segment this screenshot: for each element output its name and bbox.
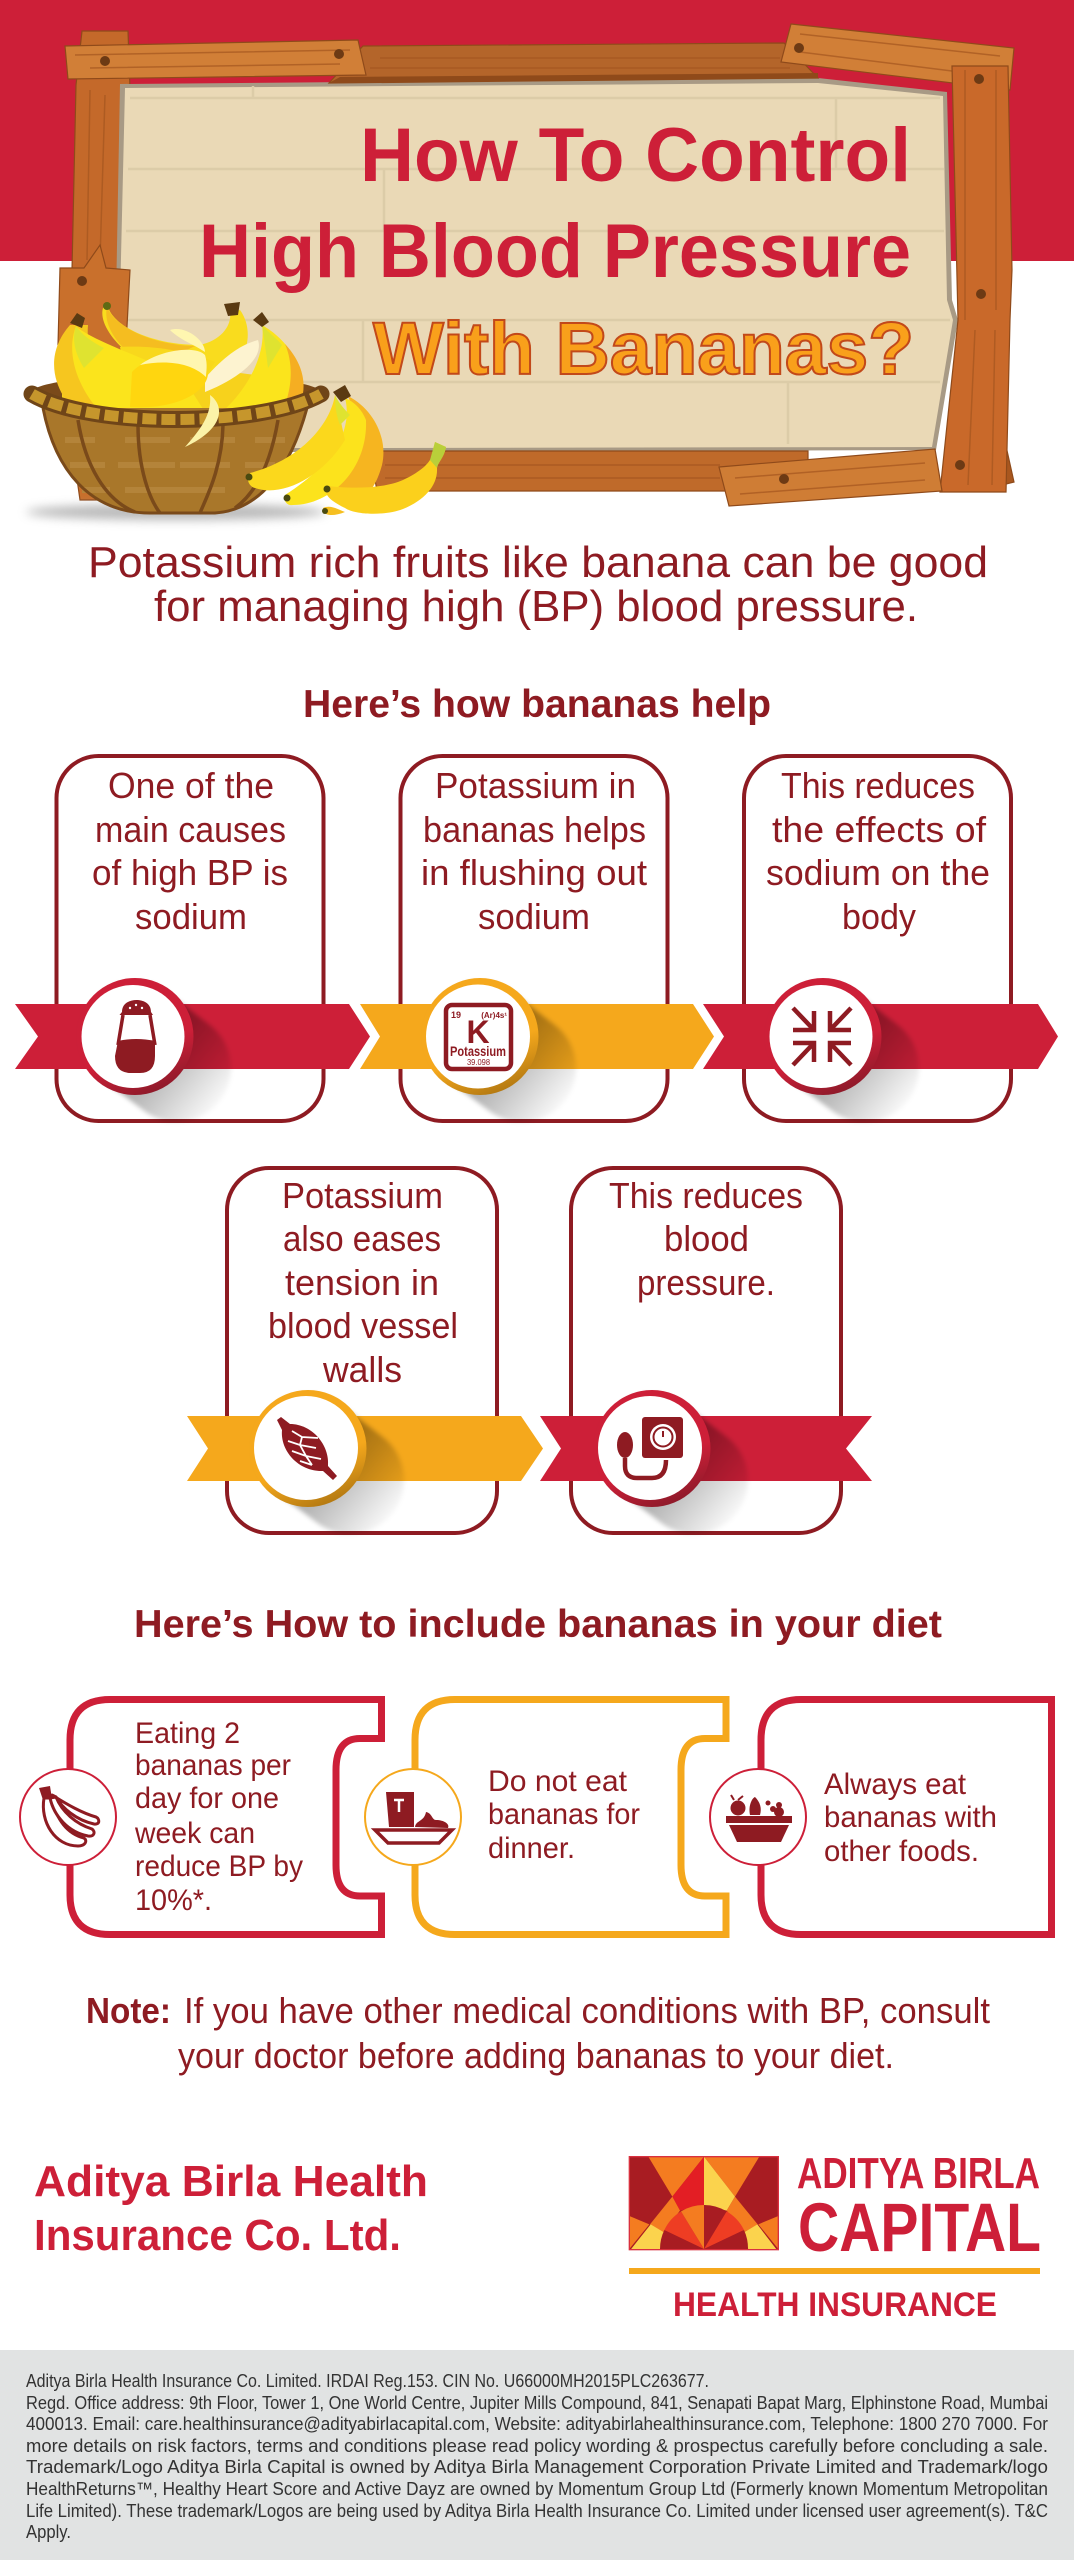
tip card 2 text: Do not eat	[488, 1765, 628, 1798]
disclaimer footer: Trademark/Logo Aditya Birla Capital is owned by Aditya Birla Management Corporation Private Limited and Trademark/logo	[26, 2457, 1048, 2477]
basket back rim	[29, 374, 323, 414]
icon: potassium element tile	[422, 978, 538, 1095]
step card 5 text: pressure.	[637, 1262, 775, 1303]
tip card 2 text: dinner.	[488, 1832, 575, 1865]
tip card 1 text: day for one	[135, 1782, 279, 1815]
intro text: for managing high (BP) blood pressure.	[154, 582, 918, 631]
tip card 2 text: bananas for	[488, 1798, 640, 1831]
Aditya Birla Capital logo: HEALTH INSURANCE	[673, 2286, 997, 2324]
ribbon arrow 2	[360, 1004, 714, 1069]
step card 1 text: sodium	[135, 896, 247, 937]
step card 1 text: main causes	[95, 809, 286, 850]
icon: potassium element tile: 39.098	[467, 1057, 490, 1067]
step card 1 text	[92, 765, 288, 937]
wooden right post	[940, 66, 1012, 492]
icon: banana bunch	[20, 1769, 116, 1865]
title: High Blood Pressure	[199, 209, 911, 294]
company name: Insurance Co. Ltd.	[34, 2211, 401, 2260]
step card 1 text: of high BP is	[92, 852, 288, 893]
disclaimer footer: 400013. Email: care.healthinsurance@adityabirlacapital.com, Website: adityabirlahealthinsurance.com, Telephone: 1800 270 7000. For	[26, 2414, 1048, 2434]
tip card 1 text: reduce BP by	[135, 1850, 303, 1883]
ribbon arrow 4	[187, 1416, 543, 1481]
red header band	[0, 0, 1074, 261]
tip card 1 text: 10%*.	[135, 1884, 212, 1917]
step card 4 text: Potassium	[282, 1175, 443, 1216]
step card 2 text: Potassium in	[435, 765, 636, 806]
tip card 1 text: bananas per	[135, 1749, 291, 1782]
wooden bottom right plank	[719, 449, 942, 506]
disclaimer footer: Apply.	[26, 2522, 71, 2542]
tip card 3 outline	[761, 1700, 1052, 1934]
icon: fruit bowl	[710, 1769, 806, 1865]
wooden left upper post	[72, 31, 130, 270]
icon: potassium element tile: 19	[451, 1010, 461, 1020]
icon: salt shaker	[76, 978, 194, 1095]
step card 2 outline	[400, 756, 668, 1121]
wooden top right plank	[781, 24, 1014, 90]
disclaimer footer	[0, 2350, 1074, 2560]
step card 4 text: blood vessel	[268, 1305, 458, 1346]
step card 3 text: the effects of	[772, 809, 987, 850]
note: Note:	[86, 1990, 171, 2031]
step card 5 text	[609, 1175, 803, 1303]
tip card 3 text: Always eat	[824, 1768, 967, 1801]
wood planks panel	[116, 78, 958, 452]
disclaimer footer: HealthReturns™, Healthy Heart Score and Active Dayz are owned by Momentum Group Ltd (Formerly known Momentum Metropolitan	[26, 2479, 1048, 2499]
tip card 1 outline	[70, 1700, 382, 1934]
step card 3 text: sodium on the	[766, 852, 990, 893]
wooden left lower post	[58, 245, 130, 500]
basket rope rim	[32, 394, 321, 420]
drooping banana peel	[185, 395, 219, 447]
right nubs behind frame	[990, 444, 1014, 488]
tip card 2 text	[488, 1765, 640, 1865]
note	[86, 1990, 990, 2076]
company name: Aditya Birla Health	[34, 2157, 428, 2206]
company name	[34, 2157, 428, 2260]
logo mark	[629, 2157, 778, 2250]
ribbon arrow 3	[703, 1004, 1058, 1069]
step card 5 outline	[571, 1168, 841, 1533]
step card 2 text: sodium	[478, 896, 590, 937]
wooden top middle plank	[329, 43, 818, 83]
intro text	[88, 538, 988, 631]
tip card 1 text	[134, 1717, 303, 1917]
step card 3 text: body	[842, 896, 916, 937]
icon: meal tray	[365, 1769, 461, 1865]
tip card 1 text: week can	[134, 1817, 255, 1850]
tip card 3 text: bananas with	[824, 1801, 997, 1834]
step card 3 outline	[744, 756, 1011, 1121]
step card 4 outline	[227, 1168, 497, 1533]
step card 2 text: in flushing out	[421, 852, 647, 893]
disclaimer footer: Aditya Birla Health Insurance Co. Limited. IRDAI Reg.153. CIN No. U66000MH2015PLC263677.	[26, 2371, 709, 2391]
tip card 2 outline	[415, 1700, 726, 1934]
step card 1 outline	[56, 756, 324, 1121]
loose bananas	[246, 385, 446, 515]
bananas in basket	[54, 302, 304, 415]
step card 4 text: tension in	[285, 1262, 439, 1303]
wooden top left plank	[65, 40, 366, 79]
icon: potassium element tile: Potassium	[450, 1043, 506, 1059]
step card 4 text: also eases	[283, 1218, 441, 1259]
icon: compress arrows	[764, 978, 882, 1095]
step card 4 text: walls	[322, 1349, 402, 1390]
wooden bottom plank	[370, 451, 808, 491]
basket body	[43, 408, 307, 513]
ribbon 5	[540, 1416, 872, 1481]
step card 5 text: This reduces	[609, 1175, 803, 1216]
tip card 1 text: Eating 2	[135, 1717, 240, 1750]
heading: include bananas in diet: Here’s How to include bananas in your diet	[134, 1603, 942, 1646]
heading: how bananas help: Here’s how bananas help	[303, 683, 771, 726]
step card 2 text	[421, 765, 647, 937]
step card 1 text: One of the	[108, 765, 274, 806]
title: With Bananas?	[373, 307, 914, 390]
step card 2 text: bananas helps	[423, 809, 646, 850]
icon: blood pressure gauge	[594, 1390, 710, 1507]
wooden sign board	[58, 24, 1014, 506]
step card 4 text	[268, 1175, 458, 1390]
intro text: Potassium rich fruits like banana can be good	[88, 538, 988, 587]
tip card 3 text	[824, 1768, 997, 1868]
note: your doctor before adding bananas to your diet.	[178, 2035, 894, 2076]
banana basket illustration	[26, 302, 446, 520]
disclaimer footer: more details on risk factors, terms and conditions please read policy wording & prospectus carefully before concluding a sale.	[26, 2436, 1048, 2456]
step card 3 text: This reduces	[781, 765, 975, 806]
logo divider	[629, 2268, 1040, 2274]
note: If you have other medical conditions with BP, consult	[184, 1990, 990, 2031]
step card 3 text	[766, 765, 990, 937]
title: How To Control	[360, 113, 911, 198]
Aditya Birla Capital logo	[629, 2149, 1041, 2324]
title	[199, 113, 914, 390]
basket shadow	[26, 504, 326, 520]
icon: muscle fibre	[250, 1390, 366, 1507]
icon: potassium element tile: K	[466, 1014, 490, 1050]
ribbon arrow 1	[15, 1004, 370, 1069]
tip card 3 text: other foods.	[824, 1835, 979, 1868]
step card 5 text: blood	[664, 1218, 749, 1259]
icon: potassium element tile: (Ar)4s¹	[481, 1011, 507, 1020]
